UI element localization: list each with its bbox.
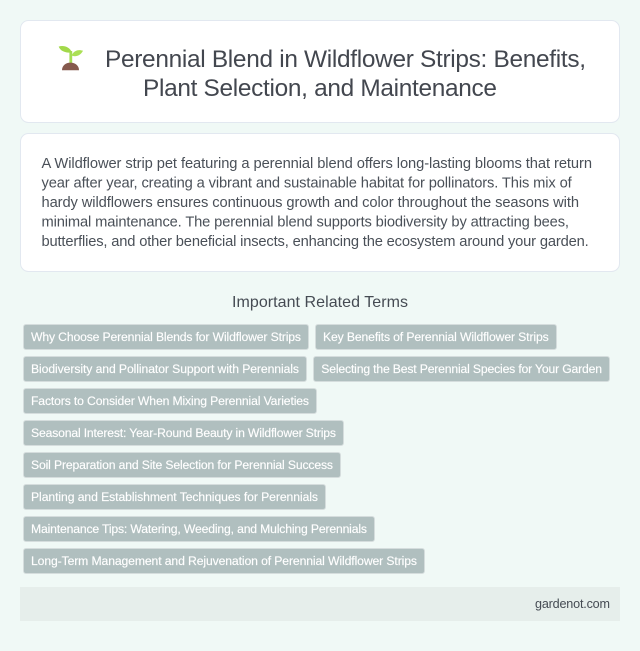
text block: description: hardy wildflowers ensures continuous growth and color throughout the seasons with xyxy=(42,195,579,211)
panel: title card xyxy=(20,20,620,122)
pill: factors xyxy=(24,388,316,414)
pill: biodiversity xyxy=(24,356,306,382)
text block: description: butterflies, and other beneficial insects, enhancing the ecosystem around your garden. xyxy=(42,234,589,250)
footer: source: gardenot.com xyxy=(535,597,610,611)
title xyxy=(105,46,586,102)
pill: soil preparation xyxy=(24,452,340,478)
term pills xyxy=(24,324,610,574)
heading: related terms: Important Related Terms xyxy=(232,294,408,311)
text block: description: A Wildflower strip pet featuring a perennial blend offers long-lasting blooms that return xyxy=(42,156,592,172)
pill: biodiversity: Biodiversity and Pollinator Support with Perennials xyxy=(31,362,299,376)
pill: maintenance xyxy=(24,516,374,542)
pill: factors: Factors to Consider When Mixing Perennial Varieties xyxy=(31,394,309,408)
pill: why choose: Why Choose Perennial Blends for Wildflower Strips xyxy=(31,330,301,344)
pill: key benefits: Key Benefits of Perennial Wildflower Strips xyxy=(323,330,549,344)
pill: key benefits xyxy=(316,324,556,350)
footer xyxy=(20,587,620,621)
pill: maintenance: Maintenance Tips: Watering, Weeding, and Mulching Perennials xyxy=(31,522,367,536)
pill: planting xyxy=(24,484,326,510)
icon: seedling xyxy=(59,46,83,70)
pill: long-term xyxy=(24,548,424,574)
text block: description: year after year, creating a vibrant and sustainable habitat for pollinators. This mix of xyxy=(42,176,573,192)
pill: why choose xyxy=(24,324,308,350)
pill: seasonal interest: Seasonal Interest: Year-Round Beauty in Wildflower Strips xyxy=(31,426,336,440)
title: Plant Selection, and Maintenance xyxy=(143,75,497,102)
pill: soil preparation: Soil Preparation and Site Selection for Perennial Success xyxy=(31,458,333,472)
panel: description xyxy=(20,134,620,272)
pill: planting: Planting and Establishment Techniques for Perennials xyxy=(31,490,318,504)
pill: selecting species: Selecting the Best Perennial Species for Your Garden xyxy=(321,362,602,376)
text block: description: minimal maintenance. The perennial blend supports biodiversity by attracting bees, xyxy=(42,214,569,230)
text block: description xyxy=(42,156,592,250)
title: Perennial Blend in Wildflower Strips: Benefits, xyxy=(105,46,586,73)
pill: selecting species xyxy=(314,356,610,382)
pill: seasonal interest xyxy=(24,420,344,446)
pill: long-term: Long-Term Management and Rejuvenation of Perennial Wildflower Strips xyxy=(31,554,417,568)
